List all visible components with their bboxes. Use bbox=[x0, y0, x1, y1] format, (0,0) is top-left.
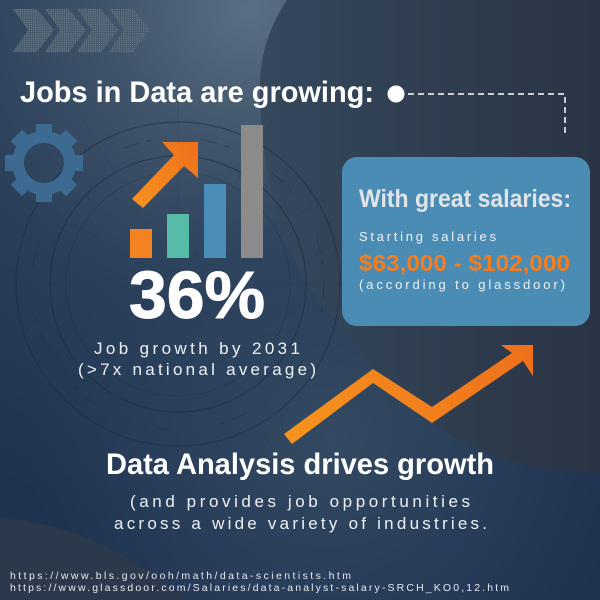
statistic: 36%: 36% bbox=[129, 258, 265, 333]
text: according to glassdoor: (according to glassdoor) bbox=[359, 277, 565, 292]
heading: data analysis: Data Analysis drives growth bbox=[106, 448, 494, 481]
dark curved shape: top right bbox=[260, 0, 600, 473]
text: sources bbox=[10, 570, 509, 594]
salary range: $63,000 - $102,000 bbox=[359, 250, 570, 276]
arrow: bar chart growth bbox=[132, 142, 198, 208]
text: sources: https://www.bls.gov/ooh/math/data-scientists.htm bbox=[10, 570, 351, 582]
text: job growth: (>7x national average) bbox=[78, 360, 316, 379]
dark curved shape: bottom left bbox=[0, 518, 186, 600]
panel: salaries bbox=[342, 157, 590, 326]
arrow: zigzag growth bbox=[284, 345, 533, 444]
text: job growth: Job growth by 2031 bbox=[94, 339, 300, 358]
text: job opportunities: (and provides job opportunities bbox=[130, 492, 470, 511]
icon: dotted chevrons bbox=[13, 9, 150, 52]
text: job opportunities: across a wide variety of industries. bbox=[114, 514, 487, 533]
text: starting salaries: Starting salaries bbox=[359, 229, 496, 244]
connector: dot and dashed line bbox=[388, 86, 565, 135]
text: job growth bbox=[78, 339, 316, 379]
title: Jobs in Data are growing: bbox=[20, 76, 374, 109]
heading: salaries: With great salaries: bbox=[359, 185, 571, 213]
text: sources: https://www.glassdoor.com/Salaries/data-analyst-salary-SRCH_KO0,12.htm bbox=[10, 582, 509, 594]
text: job opportunities bbox=[114, 492, 487, 533]
concentric radial chart decoration bbox=[0, 100, 345, 470]
bar chart bbox=[130, 125, 263, 258]
icon: gear bbox=[5, 124, 83, 202]
